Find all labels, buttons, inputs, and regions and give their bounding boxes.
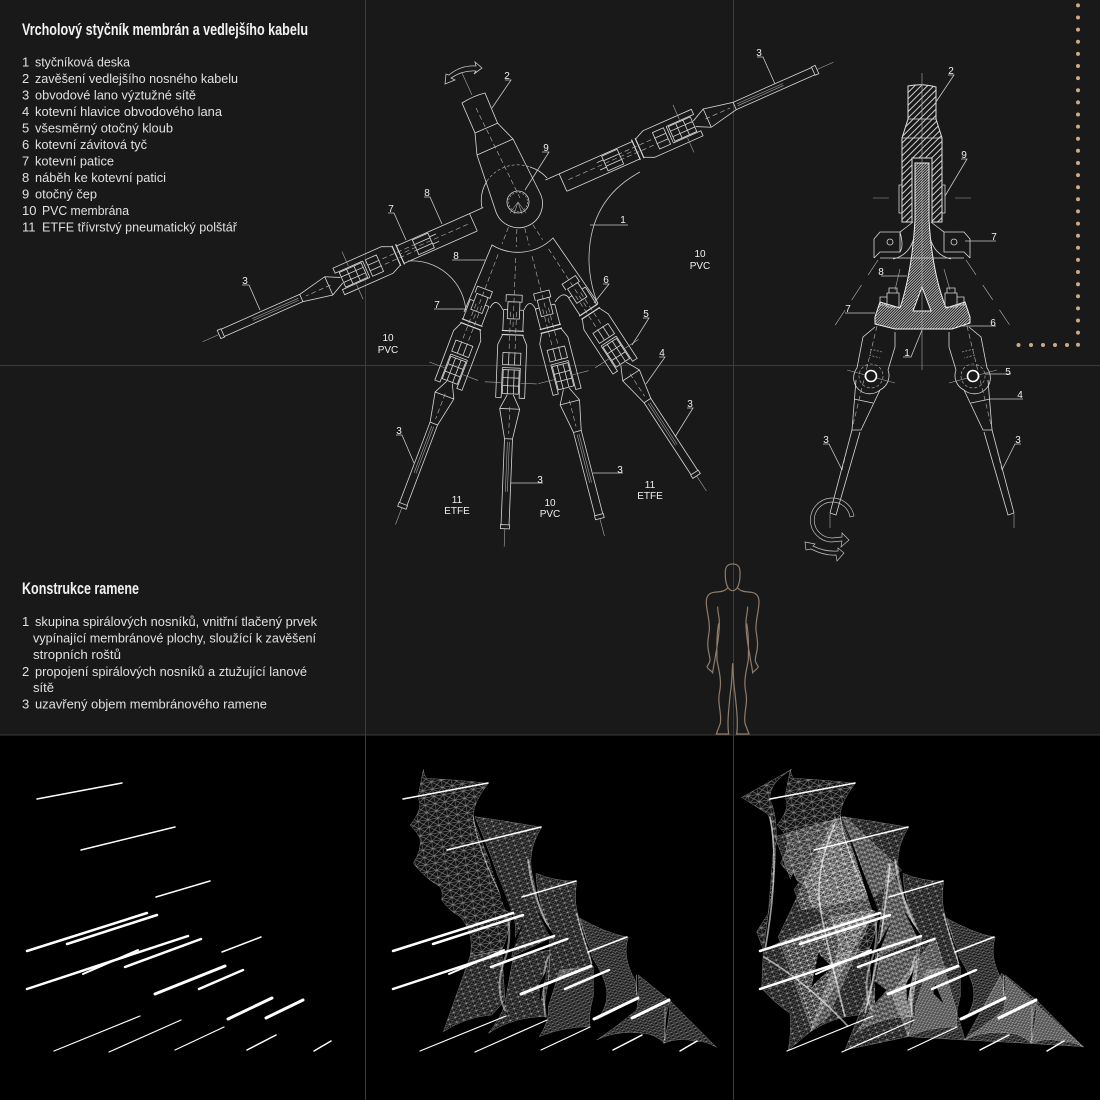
arm: fan arm 2	[478, 228, 543, 548]
panel: bars with cable mesh (step 2)	[393, 769, 717, 1052]
leader labels: 5	[1005, 367, 1011, 378]
bars overlay	[760, 783, 1064, 1052]
legend list: node parts: 5	[22, 120, 29, 136]
leader labels: 7	[388, 204, 394, 215]
leader labels: PVC	[690, 261, 710, 272]
leader labels: 1	[904, 348, 910, 359]
leader labels: 7	[845, 304, 851, 315]
legend list: node parts: 3	[22, 88, 29, 102]
top block section	[902, 85, 942, 222]
legend list: node parts: 8	[22, 170, 29, 185]
anchor brackets and bolts	[830, 222, 1015, 333]
legend list: node parts: 7	[22, 154, 29, 168]
leader labels: 3	[687, 399, 693, 410]
legend list: node parts: 6	[22, 137, 29, 152]
leader labels: 3	[756, 48, 762, 59]
text block: arm construction list: uzavřený objem membránového ramene	[35, 696, 267, 712]
leader labels: PVC	[378, 345, 398, 356]
membrane mesh towers	[777, 769, 1084, 1047]
arm: fan arm 3	[500, 222, 630, 543]
panel: closed arm volume (step 3)	[742, 769, 1084, 1052]
leader labels: 3	[537, 475, 543, 486]
legend list: node parts: kotevní patice	[35, 154, 114, 168]
leader labels: 6	[990, 318, 996, 329]
text block: arm construction list: 1	[22, 614, 29, 629]
leader labels: 5	[643, 309, 649, 320]
leader labels	[242, 48, 775, 520]
icon: lower rotation arrow	[805, 542, 844, 561]
text block: arm construction list	[22, 614, 317, 712]
leader labels: 4	[1017, 390, 1023, 401]
dark gaps in mesh	[775, 873, 943, 1003]
arm: left lower arm	[830, 326, 895, 528]
legend list: node parts: 4	[22, 104, 29, 119]
arm: fan arm 1	[371, 218, 533, 534]
leader labels: 8	[453, 251, 459, 262]
leader labels: 9	[961, 150, 967, 161]
text block: arm construction list: vypínající membránové plochy, sloužící k zavěšení	[33, 630, 316, 646]
leader labels: 10	[694, 249, 706, 260]
leader labels: 7	[434, 300, 440, 311]
text block: arm construction list: sítě	[33, 680, 54, 695]
legend list: node parts: PVC membrána	[42, 203, 130, 218]
leader labels: 10	[544, 498, 556, 509]
leader labels: 1	[620, 215, 626, 226]
leader labels: 10	[382, 333, 394, 344]
arm: right lower arm	[949, 326, 1014, 528]
drawing: plan view of node	[192, 38, 844, 548]
text block: arm construction list: 3	[22, 696, 29, 712]
title: node section: Vrcholový styčník membrán a vedlejšího kabelu	[22, 20, 308, 39]
leader labels: 8	[878, 267, 884, 278]
leader labels: 3	[396, 426, 402, 437]
legend list: node parts: obvodové lano výztužné sítě	[35, 88, 196, 102]
leader labels: PVC	[540, 509, 560, 520]
fan plate outline	[464, 238, 598, 312]
text block: arm construction list: propojení spirálových nosníků a ztužující lanové	[35, 664, 307, 679]
legend list: node parts: 11	[22, 220, 36, 234]
dark top background	[0, 0, 1100, 735]
arm: lower left long arm	[192, 192, 497, 366]
legend list: node parts: 10	[22, 203, 36, 218]
legend list: node parts: styčníková deska	[35, 54, 131, 70]
arm: fan arm 4	[511, 210, 728, 505]
bars overlay	[393, 783, 697, 1052]
legend list: node parts	[22, 54, 238, 234]
leader labels: 11	[452, 495, 463, 506]
leader labels: 4	[659, 348, 665, 359]
legend list: node parts: 9	[22, 186, 29, 202]
legend list: node parts: všesměrný otočný kloub	[35, 120, 173, 136]
leader labels	[823, 66, 1023, 470]
leader labels: ETFE	[444, 506, 470, 517]
black bottom background	[0, 735, 1100, 1100]
legend list: node parts: ETFE třívrstvý pneumatický polštář	[42, 220, 238, 234]
hatched node plate	[875, 163, 970, 329]
leader labels: 3	[823, 435, 829, 446]
legend list: node parts: otočný čep	[35, 186, 97, 202]
arm: upper right long arm	[539, 38, 844, 212]
panel: bars only (step 1)	[27, 783, 331, 1052]
leader labels: 3	[1015, 435, 1021, 446]
text block: arm construction list: stropních roštů	[33, 647, 121, 662]
text block: arm construction list: 2	[22, 664, 29, 679]
leader labels: 3	[617, 465, 623, 476]
human figure for scale	[706, 564, 759, 734]
leader labels: 9	[543, 143, 549, 154]
legend list: node parts: kotevní závitová tyč	[35, 137, 147, 152]
extra back-side mesh	[742, 769, 1083, 1050]
text block: arm construction list: skupina spirálových nosníků, vnitřní tlačený prvek	[35, 614, 317, 629]
icon: curl rotation arrow	[810, 498, 854, 547]
legend list: node parts: náběh ke kotevní patici	[35, 170, 166, 185]
leader labels: ETFE	[637, 491, 663, 502]
legend list: node parts: 1	[22, 54, 29, 70]
leader labels: 3	[242, 276, 248, 287]
membrane edge arcs	[408, 172, 640, 312]
membrane mesh towers	[410, 769, 717, 1047]
icon: rotation arrow	[445, 62, 482, 84]
hub with top arm	[462, 93, 547, 228]
legend list: node parts: zavěšení vedlejšího nosného kabelu	[35, 71, 238, 86]
legend list: node parts: kotevní hlavice obvodového lana	[35, 104, 223, 119]
leader labels: 11	[645, 480, 656, 491]
dotted tan frame	[1016, 3, 1080, 347]
leader labels: 8	[424, 188, 430, 199]
leader labels: 6	[603, 275, 609, 286]
legend list: node parts: 2	[22, 71, 29, 86]
leader labels: 7	[991, 232, 997, 243]
drawing: side section of node	[805, 66, 1023, 561]
leader labels: 2	[948, 66, 954, 77]
leader labels: 2	[504, 71, 510, 82]
heading: arm construction: Konstrukce ramene	[22, 579, 139, 598]
